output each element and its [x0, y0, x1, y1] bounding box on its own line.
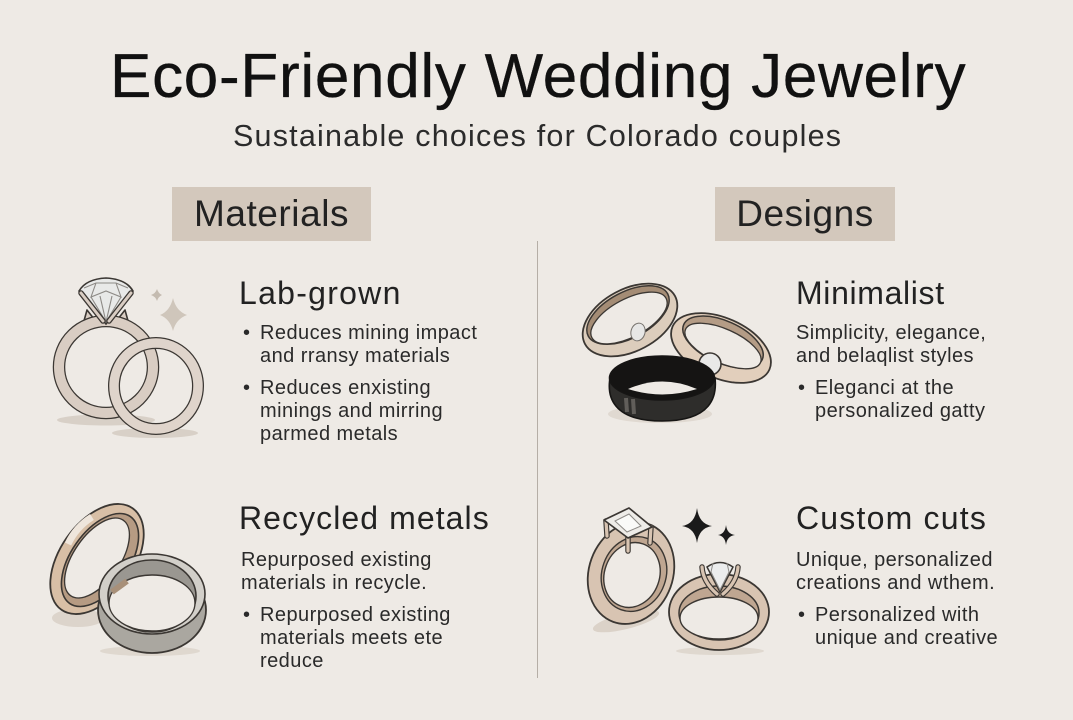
text: Lab-grown: Lab-grown [239, 275, 402, 311]
text: Minimalist [796, 275, 986, 422]
heading: Designs [715, 187, 895, 241]
text: Custom cuts: Unique, personalized [796, 549, 993, 571]
icon: lab-grown diamond rings [52, 277, 204, 438]
text: Recycled metals: • [243, 604, 250, 626]
text: Recycled metals: Recycled metals [239, 500, 490, 536]
text: Lab-grown: • [243, 322, 250, 344]
text: Minimalist: personalized gatty [815, 400, 985, 422]
text: Lab-grown: minings and mirring [260, 400, 443, 422]
text: Recycled metals: materials meets ete [260, 627, 443, 649]
text: Custom cuts: unique and creative [815, 627, 998, 649]
icon: minimalist rings [582, 282, 772, 423]
text: Minimalist: Eleganci at the [815, 377, 954, 399]
text: Lab-grown: parmed metals [260, 423, 398, 445]
icon: custom cut rings [586, 507, 770, 655]
text: Custom cuts: • [798, 604, 805, 626]
text: Recycled metals: Repurposed existing [241, 549, 432, 571]
icon: recycled metal rings [49, 503, 207, 656]
heading: Designs: Designs [736, 193, 874, 234]
heading: Materials: Materials [194, 193, 349, 234]
subtitle: Sustainable choices for Colorado couples [233, 119, 842, 153]
text: Recycled metals [239, 500, 490, 672]
text: Custom cuts: Personalized with [815, 604, 979, 626]
text: Lab-grown: and rransy materials [260, 345, 450, 367]
heading: Materials [172, 187, 371, 241]
text: Recycled metals: materials in recycle. [241, 572, 427, 594]
text: Recycled metals: reduce [260, 650, 324, 672]
column divider [537, 241, 538, 678]
text: Lab-grown: • [243, 377, 250, 399]
text: Minimalist: Minimalist [796, 275, 945, 311]
text: Minimalist: and belaqlist styles [796, 345, 974, 367]
text: Custom cuts: Custom cuts [796, 500, 987, 536]
text: Lab-grown: Reduces mining impact [260, 322, 477, 344]
text: Minimalist: • [798, 377, 805, 399]
text: Lab-grown [239, 275, 477, 445]
text: Custom cuts [796, 500, 998, 649]
text: Recycled metals: Repurposed existing [260, 604, 451, 626]
text: Custom cuts: creations and wthem. [796, 572, 995, 594]
title: Eco-Friendly Wedding Jewelry [110, 42, 966, 111]
text: Lab-grown: Reduces enxisting [260, 377, 431, 399]
text: Minimalist: Simplicity, elegance, [796, 322, 986, 344]
